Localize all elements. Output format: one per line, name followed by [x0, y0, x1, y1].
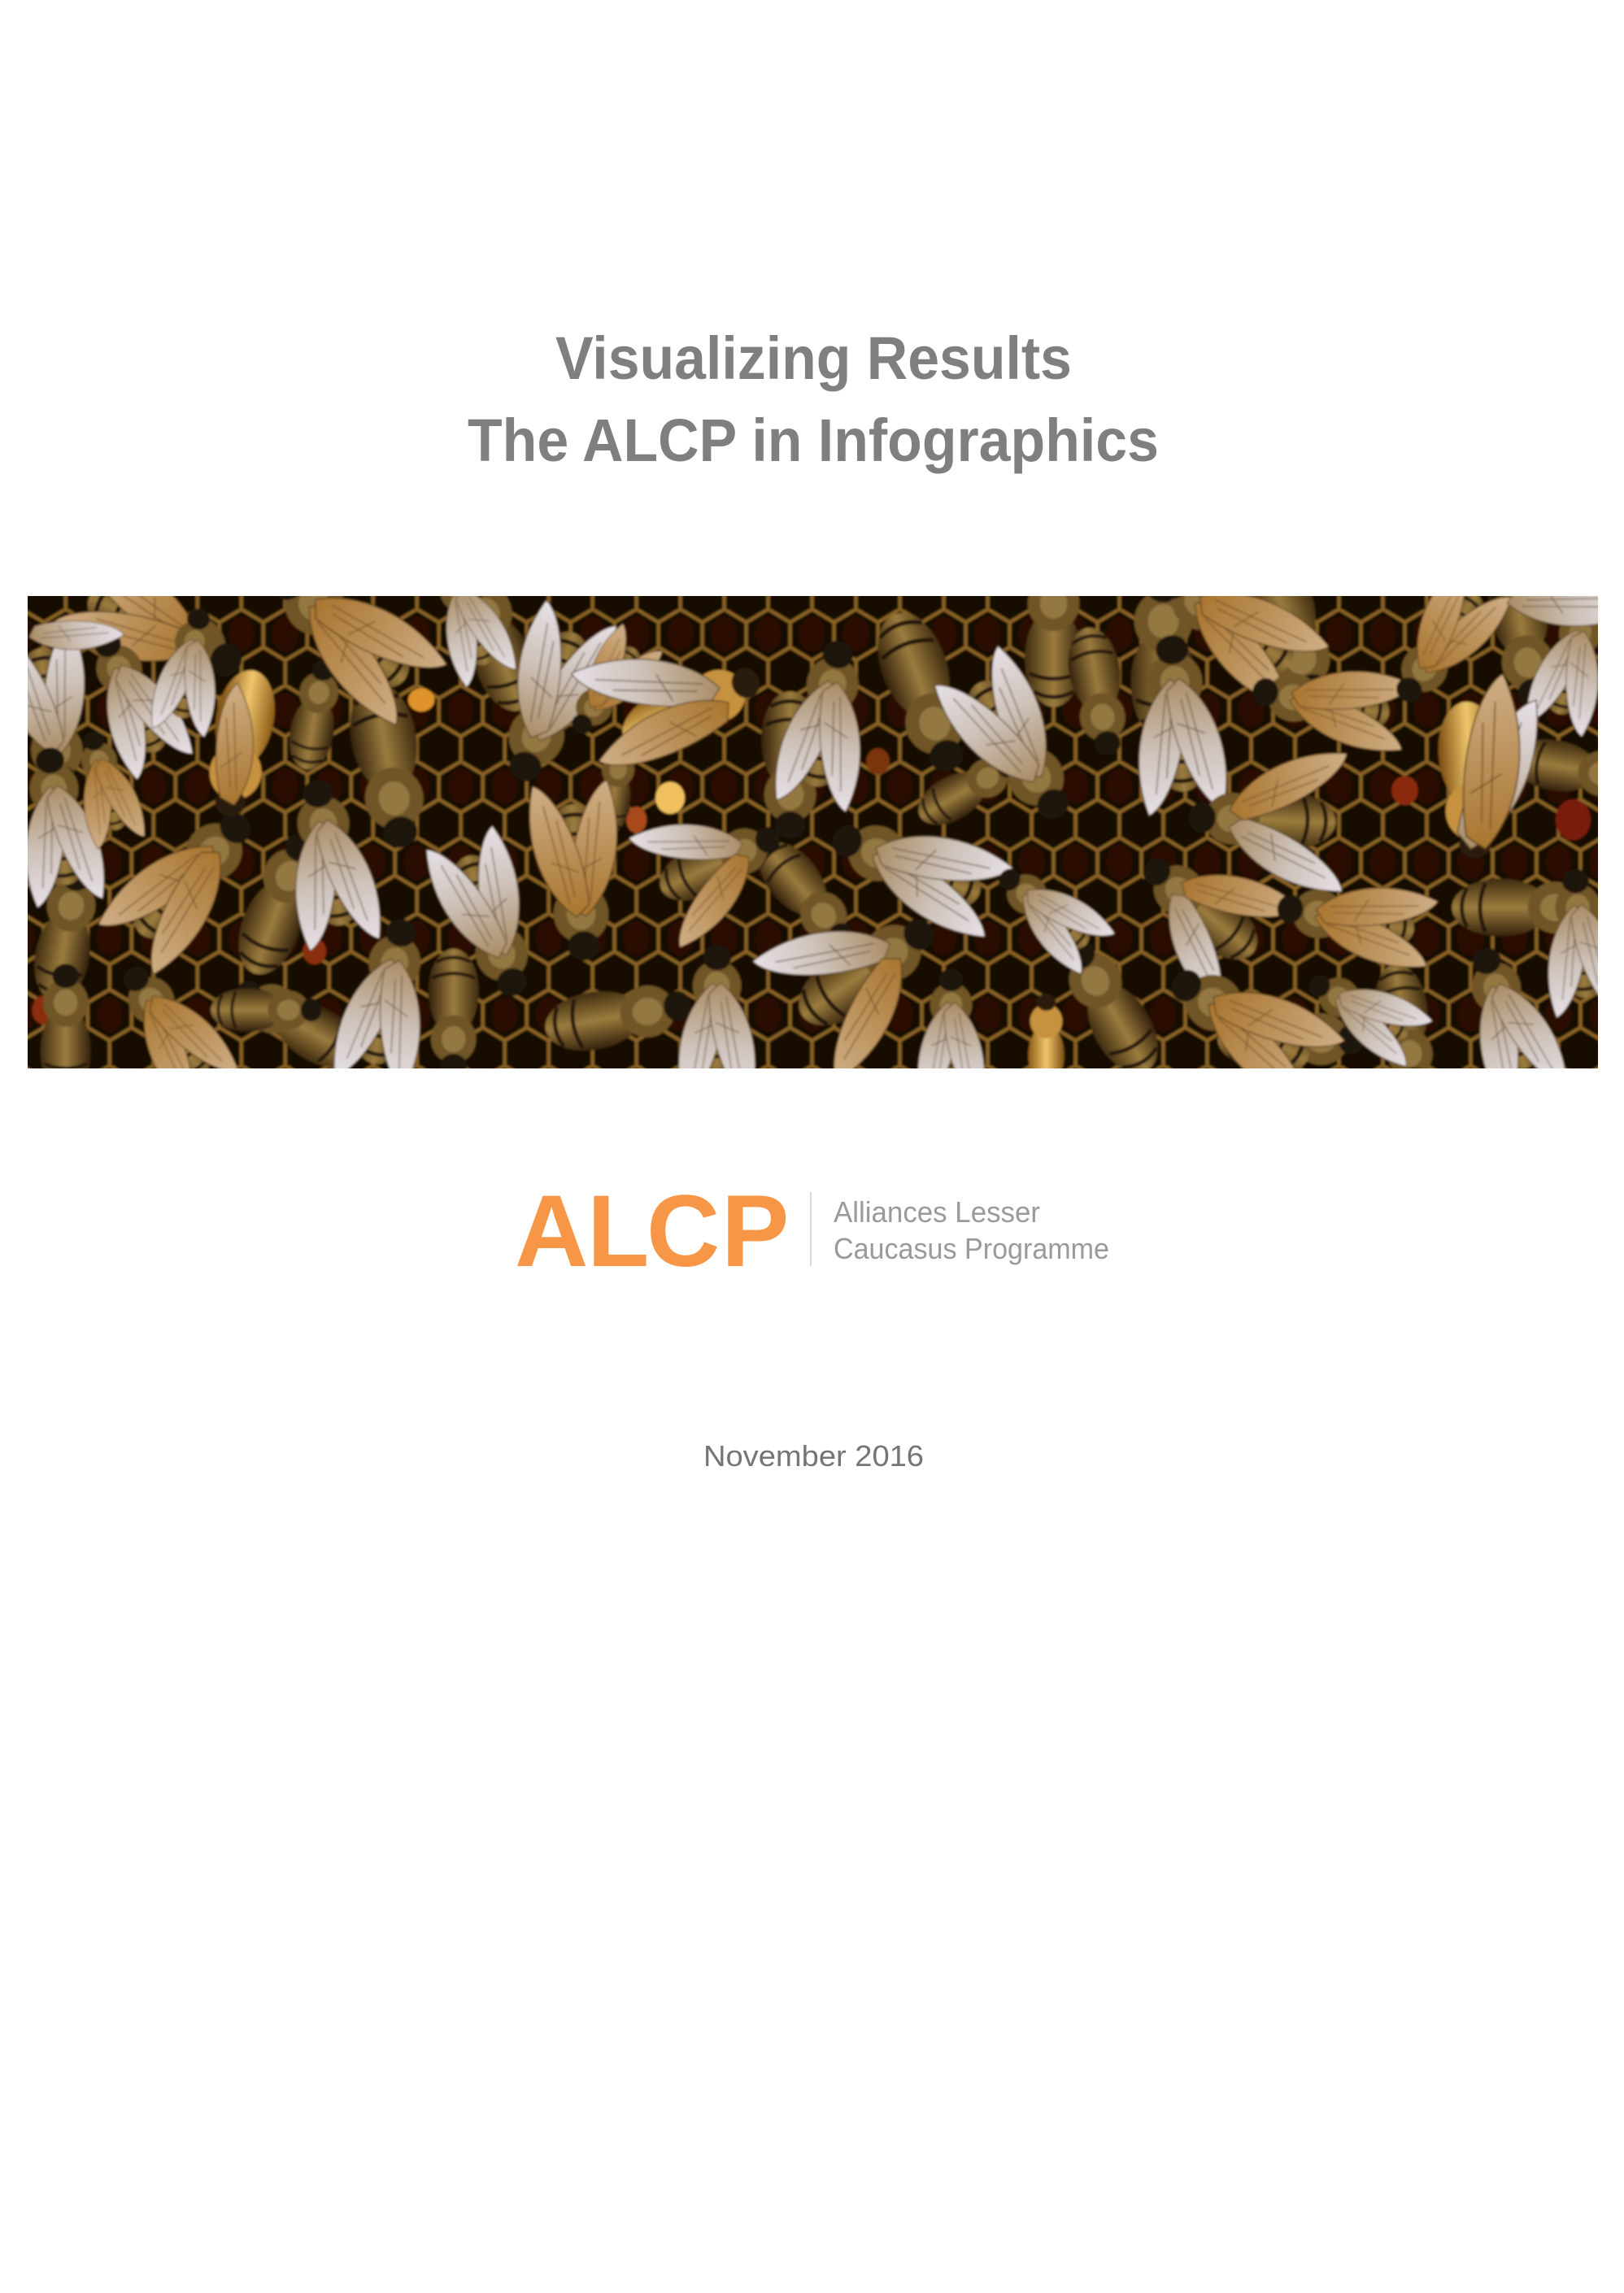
logo tagline [834, 1195, 1109, 1265]
logo: ALCP [515, 1179, 1109, 1277]
title: The ALCP in Infographics [468, 407, 1159, 474]
date: November 2016 [703, 1439, 924, 1473]
background bees [0, 537, 1624, 1096]
honeycomb background [15, 585, 1609, 1083]
title: Visualizing Results [555, 324, 1072, 392]
photo: honeybees on comb [28, 596, 1598, 1068]
logo tagline: Caucasus Programme [834, 1232, 1109, 1265]
worker bees [11, 559, 1624, 1109]
honey-filled cells [32, 688, 1591, 1025]
golden bees [198, 646, 1543, 1086]
logo tagline: Alliances Lesser [834, 1195, 1040, 1229]
title [468, 324, 1159, 474]
